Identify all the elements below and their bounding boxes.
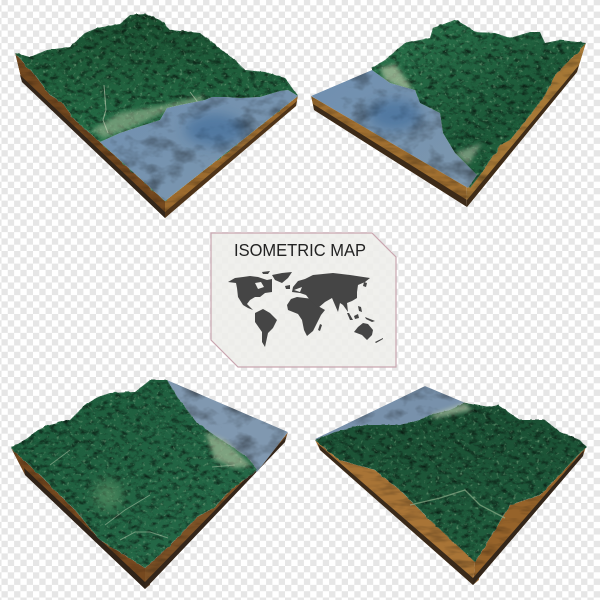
deep water patch: [369, 100, 421, 130]
forest base: [11, 380, 257, 568]
left soil side: [311, 96, 467, 207]
title: ISOMETRIC MAP: [234, 240, 366, 260]
sea surface: [165, 380, 288, 472]
sea surface: [315, 386, 470, 445]
right soil side: [165, 96, 298, 218]
world map: [228, 271, 383, 347]
Africa: [287, 297, 325, 336]
panel background: [211, 233, 396, 367]
right soil side: [473, 447, 586, 585]
North America: [228, 276, 272, 310]
lowland and valley details: [50, 432, 252, 540]
isometric map: top right, coast facing south-west: [311, 20, 586, 207]
left soil side: [15, 53, 165, 218]
forest surface: [372, 20, 586, 188]
forest surface: [315, 403, 586, 562]
forest base: [372, 20, 586, 188]
left soil side: [315, 440, 481, 585]
lowland patches: [380, 64, 412, 90]
forest base: [315, 403, 586, 562]
title panel: [211, 233, 396, 367]
lowland and river details: [92, 85, 205, 138]
sea surface: [100, 90, 298, 201]
right soil side: [466, 43, 586, 207]
coast strip: [430, 403, 472, 418]
inland water: [255, 282, 302, 292]
forest base: [15, 14, 298, 201]
forest surface: [11, 380, 257, 568]
sea surface: [311, 70, 477, 188]
Eurasia: [292, 273, 370, 312]
isometric map: bottom right, mostly forest: [315, 386, 586, 585]
isometric map: top left, coast facing south-east: [15, 14, 298, 218]
Greenland: [272, 272, 292, 283]
Australia: [354, 323, 373, 340]
valley river: [410, 490, 505, 518]
islands: [347, 313, 353, 320]
isometric map: bottom left, mostly forest: [11, 380, 288, 589]
left soil side: [11, 448, 150, 589]
forest surface: [15, 14, 298, 201]
right soil side: [145, 432, 288, 589]
South America: [255, 309, 277, 347]
deep water patch: [185, 114, 245, 146]
